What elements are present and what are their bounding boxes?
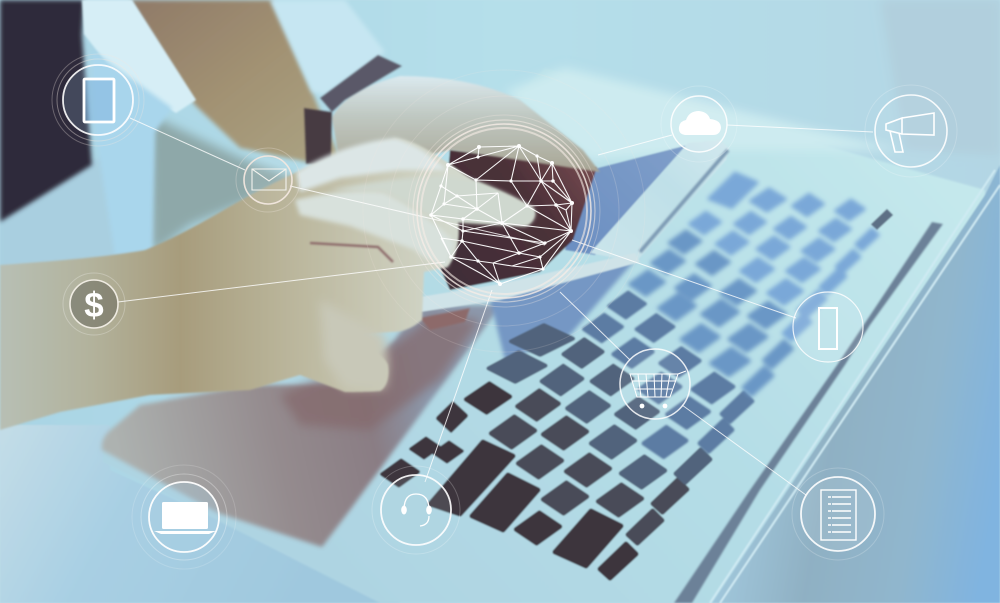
network globe [363, 70, 645, 352]
laptop edge lines [710, 170, 1000, 603]
slot and vents [674, 222, 943, 603]
phone lower bar [360, 253, 640, 325]
pale middle finger [296, 138, 447, 192]
phone screen blue part [565, 145, 688, 255]
mid-far keys [584, 293, 752, 457]
upper arm [130, 0, 345, 170]
far keys [630, 231, 792, 395]
silver phone corner [332, 306, 380, 330]
corner key [871, 209, 893, 230]
upper shirt sleeve [270, 0, 385, 95]
phone dark screen [440, 150, 597, 290]
phone side band [590, 140, 729, 262]
dark sleeve top left [0, 0, 92, 222]
red crease between fingers [310, 243, 393, 262]
watch strap [304, 55, 402, 164]
icon: smartphone [793, 292, 863, 362]
icon: headset [372, 466, 460, 554]
icon: cloud [661, 86, 737, 162]
middle keys [489, 326, 710, 487]
globe nodes [429, 144, 574, 286]
brown glow under the hand [280, 315, 480, 430]
palm rest reflection [102, 300, 505, 547]
globe rings [363, 70, 645, 352]
laptop rear pale area [505, 68, 900, 160]
connector lines [118, 118, 873, 495]
dark keys [382, 384, 636, 578]
icon: dollar: $ [84, 286, 104, 325]
reddish reflection under fingers [293, 302, 470, 330]
blue band under phone [490, 258, 637, 360]
white shirt cuff [82, 0, 196, 113]
icon: dollar [63, 273, 125, 335]
upper hand [332, 76, 600, 172]
icon: mail [236, 148, 300, 212]
icon: laptop [132, 465, 236, 569]
pale index finger [330, 176, 535, 226]
blue cuff shadow strip [92, 50, 172, 256]
right side background [712, 165, 1000, 603]
icon: projector [865, 85, 957, 177]
icon: document [792, 468, 884, 560]
keyboard [382, 173, 893, 578]
lower arm and hand [0, 138, 535, 430]
icon: tablet [52, 54, 144, 146]
farthest keys [690, 173, 878, 340]
globe wire mesh [431, 146, 572, 284]
icon: shopping cart [620, 349, 690, 419]
laptop deck [103, 68, 985, 603]
pale ring finger [295, 191, 455, 267]
thumb highlight [320, 300, 388, 388]
near keys [491, 391, 687, 543]
phone side dark edge [640, 150, 728, 252]
